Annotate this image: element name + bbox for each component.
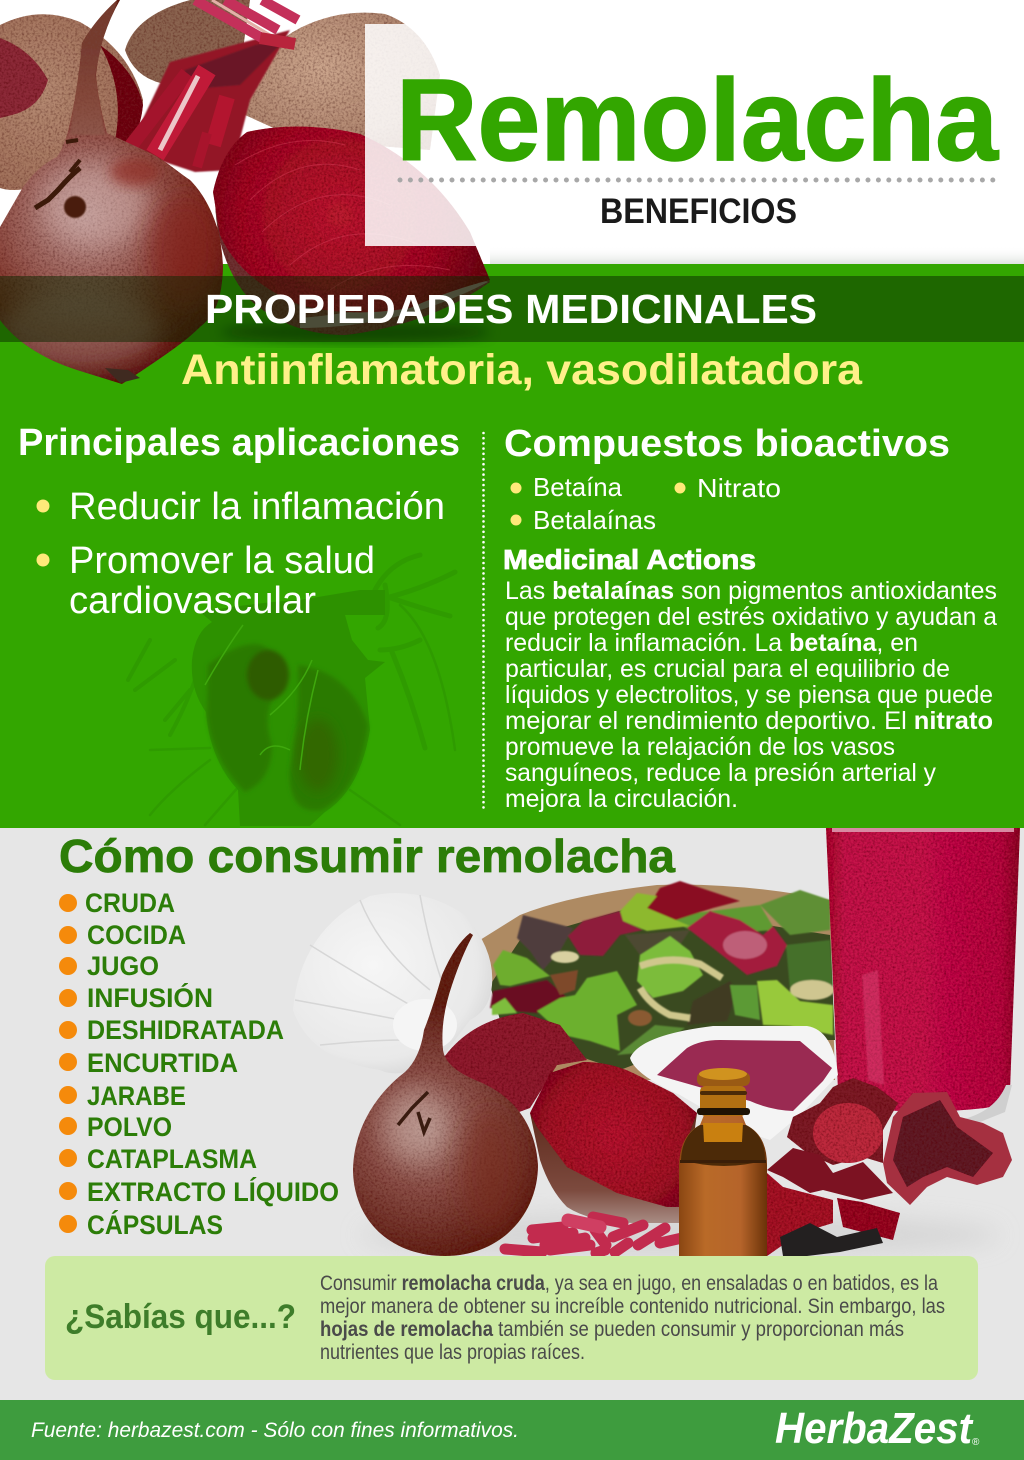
icon: faded anatomical heart [128,555,455,826]
white fade below title [490,246,1024,264]
dropper [780,1223,883,1256]
cut beet fibres [235,140,450,290]
panel: green properties section [0,264,1024,828]
text block: callout [320,1272,945,1364]
beet chips: right [883,1092,1012,1205]
panel: how to consume section [0,828,1024,1400]
text block: medicinal actions: que protegen del estrés oxidativo y ayudan a [505,603,997,631]
text block: medicinal actions: sanguíneos, reduce la presión arterial y [505,759,936,787]
beet cubes [767,1148,900,1256]
cut beet rim [215,195,490,335]
list: forms of consumption: COCIDA [87,920,186,950]
text block: medicinal actions: promueve la relajación de los vasos [505,733,895,761]
salad plate [480,885,835,1080]
beet scar blot [64,196,86,218]
list: forms of consumption: INFUSIÓN [87,982,213,1013]
text block: medicinal actions: líquidos y electrolitos, y se piensa que puede [505,681,993,709]
list: compounds: Betalaínas [533,505,656,535]
heading: propiedades medicinales: PROPIEDADES MEDICINALES [205,286,817,332]
text block: medicinal actions: reducir la inflamación. La betaína, en [505,629,918,657]
heading: compuestos bioactivos: Compuestos bioactivos [504,423,950,465]
salad leaves [490,881,834,1055]
list: forms of consumption: POLVO [87,1112,172,1142]
juice glass [826,828,1020,1112]
text block: medicinal actions: Las betalaínas son pigmentos antioxidantes [505,577,997,605]
list: applications: Reducir la inflamación [69,486,445,528]
amber bottle [679,1068,767,1256]
back cut beet [442,1013,587,1130]
source text: Fuente: herbazest.com - Sólo con fines informativos. [31,1419,519,1442]
heading: sabias que: ¿Sabías que...? [65,1298,296,1336]
footer [0,1400,1024,1460]
heading: principales aplicaciones: Principales aplicaciones [18,422,460,464]
text block: callout: Consumir remolacha cruda, ya sea en jugo, en ensaladas o en batidos, es la [320,1272,938,1295]
translucent title backdrop [365,24,1024,246]
image: whole and cut beets at top [0,0,490,390]
list: forms of consumption: ENCURTIDA [87,1048,238,1078]
front cut beet face [530,1062,697,1207]
subtitle: BENEFICIOS [600,192,797,231]
list: forms of consumption: DESHIDRATADA [87,1015,284,1045]
list: applications [36,486,445,622]
list: applications: cardiovascular [69,580,316,622]
heading: medicinal actions: Medicinal Actions [503,544,756,575]
text block: medicinal actions: particular, es crucial para el equilibrio de [505,655,950,683]
text block: medicinal actions: mejora la circulación. [505,785,738,813]
list: forms of consumption: JUGO [87,951,159,981]
list: compounds [510,472,781,535]
dotted column divider [482,433,485,810]
dotted divider under title [400,178,994,182]
big whole beet [0,0,240,390]
capsules [505,1217,682,1253]
list: forms of consumption: EXTRACTO LÍQUIDO [87,1176,339,1207]
floor shadow [360,1213,1000,1257]
text block: medicinal actions [505,577,997,813]
text block: callout: hojas de remolacha también se pueden consumir y proporcionan más [320,1318,904,1341]
logo: HerbaZest: HerbaZest [775,1404,974,1453]
list: applications: Promover la salud [69,540,375,582]
cloth bundle [293,893,492,1073]
salad underlay [490,905,835,1070]
front cut beet rim [530,1113,697,1223]
back right beet [245,13,440,150]
list: forms of consumption [59,888,339,1240]
text block: callout: mejor manera de obtener su increíble contenido nutricional. Sin embargo, las [320,1295,945,1318]
list: forms of consumption: CATAPLASMA [87,1144,257,1174]
heading: como consumir remolacha: Cómo consumir remolacha [59,830,675,882]
beet chip centre [813,1103,883,1163]
title: Remolacha [396,55,999,185]
cut beet shadow [220,322,490,342]
beet scars [398,1092,430,1132]
list: forms of consumption: JARABE [87,1081,186,1111]
whole beet [353,933,538,1256]
beet stems [128,0,298,172]
bottom root tip [105,368,140,383]
text block: callout: nutrientes que las propias raíces. [320,1341,585,1364]
subheading: properties: Antiinflamatoria, vasodilatadora [181,346,863,394]
image: beet products [293,828,1020,1260]
list: compounds: Nitrato [697,473,781,503]
sauce bowl [630,1026,838,1140]
back middle beet [125,0,250,85]
band: dark overlay [0,276,1024,342]
cut beet face [213,126,490,312]
beet chips: left [787,1078,898,1165]
registered mark: ® [972,1437,980,1448]
beet scars [35,140,80,208]
beet chip centre [893,1100,993,1187]
list: forms of consumption: CRUDA [85,888,175,918]
list: compounds: Betaína [533,472,623,502]
panel: did you know callout [45,1256,978,1380]
text block: medicinal actions: mejorar el rendimiento deportivo. El nitrato [505,707,993,735]
back left beet [0,14,143,190]
list: forms of consumption: CÁPSULAS [87,1209,223,1240]
